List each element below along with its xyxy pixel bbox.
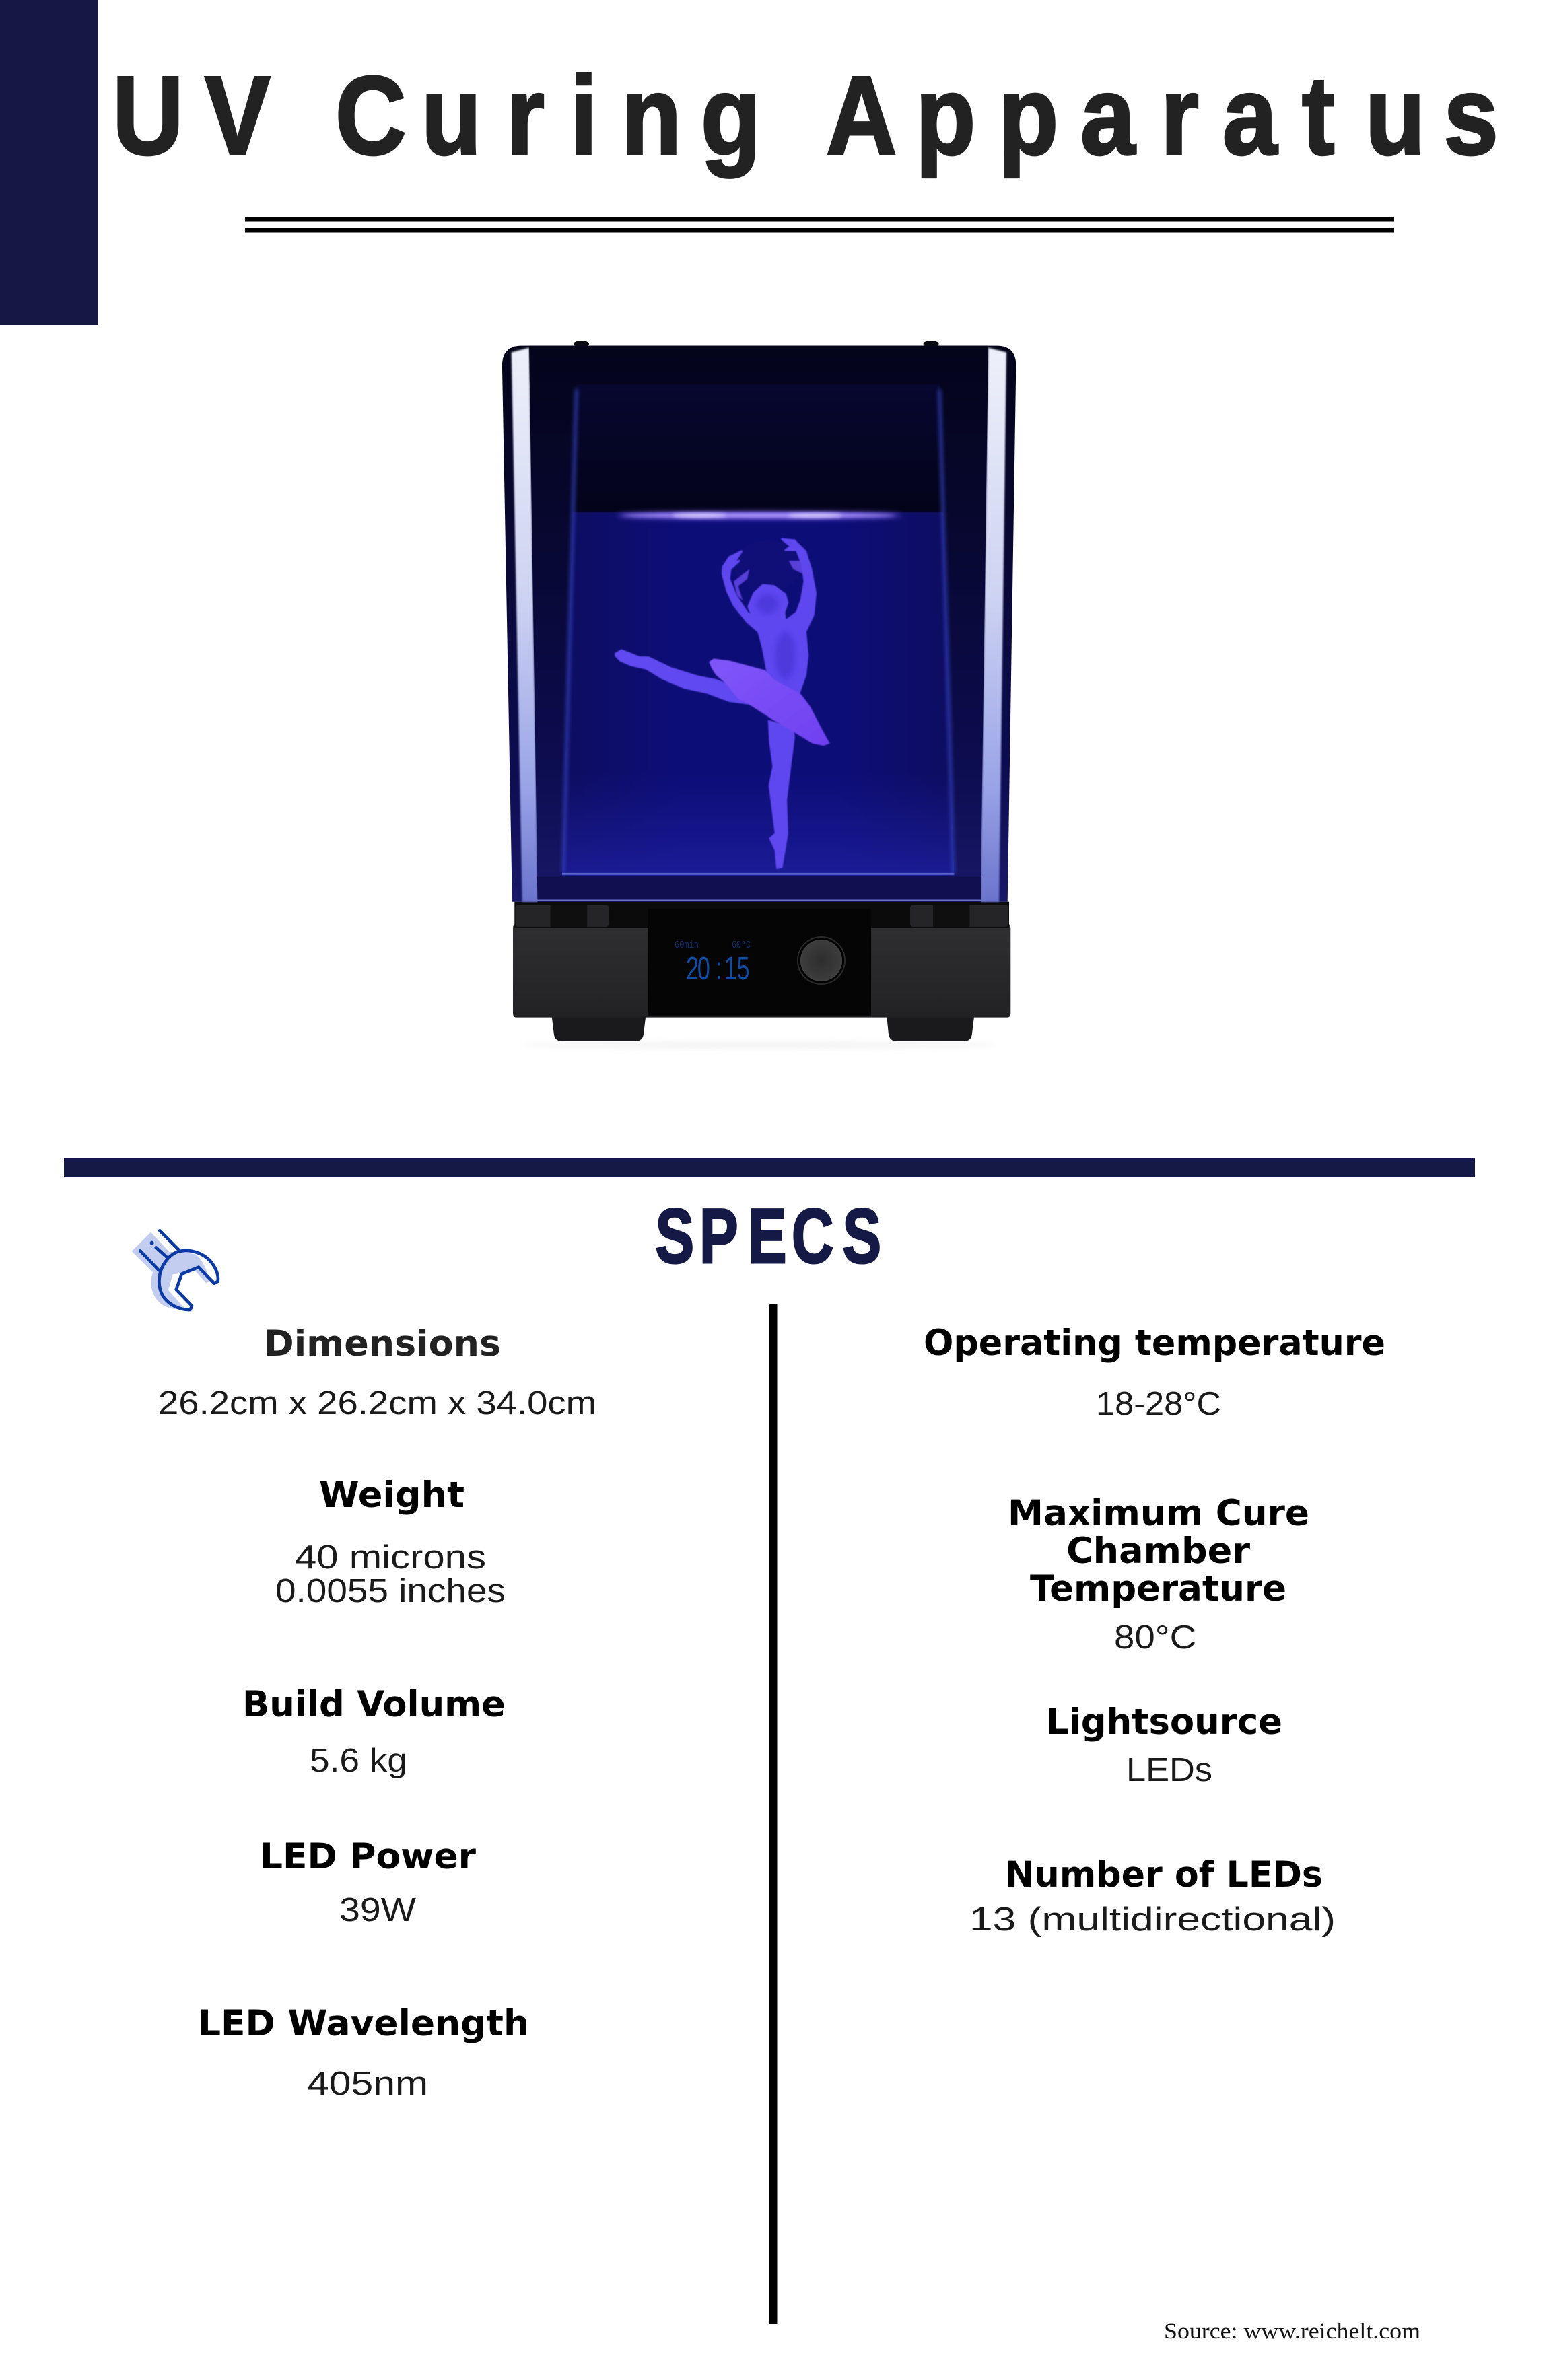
right column specs: [924, 1323, 1385, 1938]
feet: [551, 1015, 974, 1041]
standing leg: [769, 721, 794, 868]
source credit: Source: www.reichelt.com: [1164, 2319, 1420, 2344]
spec: LED power: [260, 1836, 476, 1928]
spec: weight: 0.0055 inches: [275, 1573, 506, 1609]
chamber floor glow: [562, 772, 955, 876]
spec: lightsource: Lightsource: [1046, 1702, 1282, 1743]
spec: build volume: 5.6 kg: [310, 1743, 407, 1779]
spec: operating temperature: Operating temperature: [924, 1323, 1385, 1364]
spec: weight: [275, 1475, 506, 1609]
center vertical divider: [769, 1304, 777, 2324]
body: [722, 539, 816, 694]
spec: lightsource: LEDs: [1126, 1752, 1212, 1788]
spec: LED power: 39W: [339, 1892, 417, 1928]
lamp glow: [616, 512, 902, 519]
display readout: 60min: [675, 940, 699, 951]
spec: maximum cure chamber temperature: [1008, 1493, 1309, 1656]
navy corner bar: [0, 0, 98, 325]
spec: LED wavelength: 405nm: [307, 2066, 428, 2102]
section divider bar: [64, 1158, 1475, 1177]
left column specs: [158, 1323, 596, 2102]
spec: maximum cure chamber temperature: Chamber: [1066, 1531, 1250, 1572]
spec: weight: 40 microns: [295, 1539, 486, 1576]
upper chamber: [572, 384, 943, 512]
icon: wrench: [132, 1230, 218, 1310]
right highlight strip: [981, 347, 1006, 902]
ballerina figure: [615, 539, 830, 868]
chamber side edges: [563, 389, 953, 874]
lower chamber: [562, 512, 955, 876]
control display: [648, 909, 871, 1016]
chamber backdrop between the arms: [735, 540, 802, 591]
translucent shell: [502, 346, 1016, 902]
spec: dimensions: 26.2cm x 26.2cm x 34.0cm: [158, 1385, 596, 1422]
extended leg: [615, 650, 747, 704]
product photo: UV curing chamber: [502, 341, 1016, 1047]
display readout: 60°C: [732, 940, 751, 951]
spec: build volume: Build Volume: [242, 1684, 506, 1725]
left highlight strip: [512, 347, 538, 902]
spec: dimensions: Dimensions: [264, 1323, 501, 1364]
spec: maximum cure chamber temperature: 80°C: [1114, 1619, 1196, 1656]
spec: number of LEDs: [969, 1854, 1336, 1938]
spec: LED power: LED Power: [260, 1836, 476, 1877]
title: UV Curing Apparatus: [112, 53, 1498, 178]
spec: build volume: [242, 1684, 506, 1779]
title double rule: [245, 217, 1394, 233]
control knob: [798, 937, 845, 984]
chamber floor: [533, 874, 985, 902]
tutu: [709, 658, 830, 746]
shell top bumps: [574, 341, 939, 347]
spec: number of LEDs: Number of LEDs: [1005, 1854, 1323, 1895]
spec: LED wavelength: [198, 2003, 529, 2102]
shadow under device: [520, 1043, 999, 1047]
spec: LED wavelength: LED Wavelength: [198, 2003, 529, 2044]
head and torso shading: [756, 594, 796, 680]
specs heading: SPECS: [656, 1193, 881, 1280]
display readout: 20:15: [686, 950, 749, 986]
ghost hands: [734, 561, 803, 600]
spec: operating temperature: [924, 1323, 1385, 1422]
spec: maximum cure chamber temperature: Maximum Cure: [1008, 1493, 1309, 1534]
spec: dimensions: [158, 1323, 596, 1422]
base housing: [513, 902, 1010, 1018]
spec: number of LEDs: 13 (multidirectional): [969, 1901, 1336, 1938]
spec: maximum cure chamber temperature: Temperature: [1030, 1568, 1286, 1609]
display readout: [675, 940, 751, 986]
spec: operating temperature: 18-28°C: [1096, 1386, 1221, 1422]
spec: lightsource: [1046, 1702, 1282, 1788]
inner shell panels: [529, 346, 988, 902]
spec: weight: Weight: [319, 1475, 464, 1516]
